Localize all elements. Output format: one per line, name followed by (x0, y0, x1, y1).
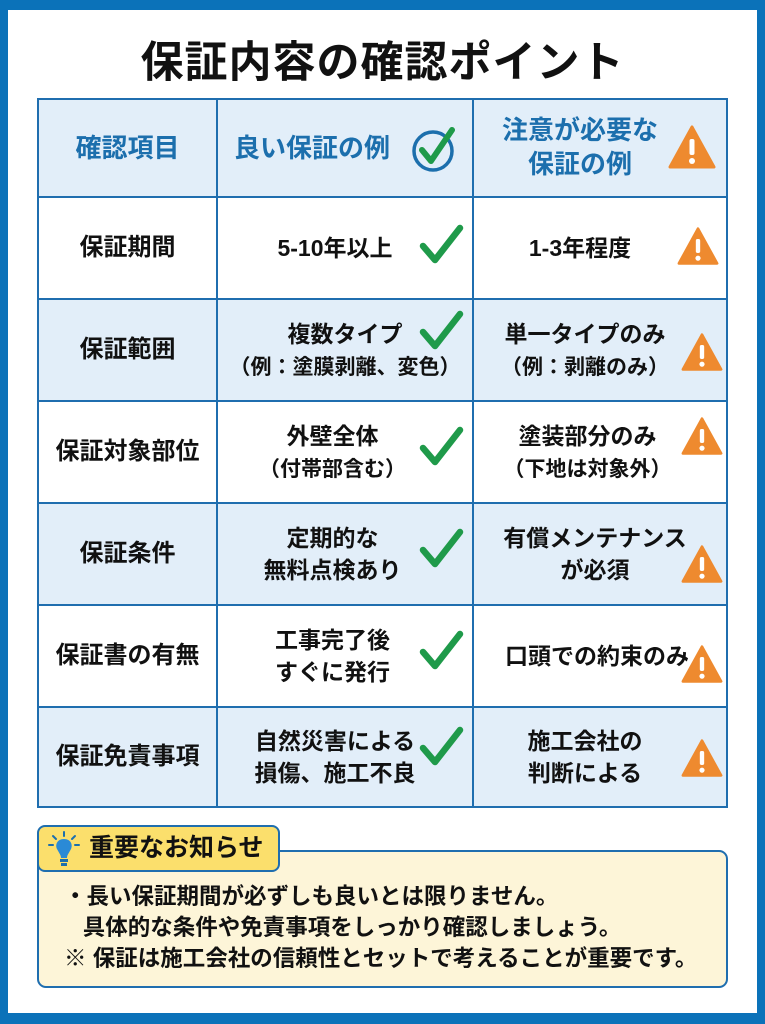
row3: 保証対象部位 (56, 438, 200, 465)
table: 1-3年程度 (529, 235, 631, 261)
row1 (39, 198, 218, 300)
table: 単一タイプのみ (504, 321, 666, 347)
table: 損傷、施工不良 (254, 760, 416, 786)
table: 有償メンテナンス (503, 525, 687, 551)
table: 自然災害による (255, 728, 415, 754)
warning icons (678, 227, 722, 777)
header: 確認項目: 確認項目 (75, 133, 180, 163)
table: が必須 (560, 557, 629, 583)
row4 (39, 504, 218, 606)
table: 施工会社の (528, 728, 642, 754)
header: 確認項目 (39, 100, 218, 198)
icon: header check circle (412, 127, 455, 172)
table: 外壁全体 (286, 423, 378, 449)
table: 塗装部分のみ (518, 423, 656, 449)
notice text: 具体的な条件や免責事項をしっかり確認しましょう。 (83, 915, 621, 940)
header: good (218, 100, 474, 198)
row2 (39, 300, 218, 402)
table: （下地は対象外） (504, 458, 672, 481)
notice text: ・長い保証期間が必ずしも良いとは限りません。 (64, 884, 558, 909)
row5: 保証書の有無 (56, 642, 200, 669)
check icons (420, 224, 464, 766)
row3 (39, 402, 218, 504)
row2: 保証範囲 (80, 336, 176, 363)
header: caution: 保証の例 (528, 149, 632, 179)
notice tab heading: 重要なお知らせ (89, 834, 264, 862)
row5 (39, 606, 218, 708)
row6 (39, 708, 218, 806)
notice text (64, 884, 697, 971)
row4: 保証条件 (80, 540, 176, 567)
table: （例：塗膜剥離、変色） (230, 356, 460, 379)
table: 判断による (528, 760, 642, 786)
title: 保証内容の確認ポイント (140, 39, 624, 87)
table: 複数タイプ (288, 321, 402, 347)
row1: 保証期間 (80, 234, 176, 261)
row6: 保証免責事項 (56, 743, 200, 770)
table: （付帯部含む） (259, 458, 406, 481)
table: （例：剥離のみ） (501, 356, 669, 379)
header: caution (474, 100, 728, 198)
table: 5-10年以上 (277, 235, 393, 261)
notice text: ※ 保証は施工会社の信頼性とセットで考えることが重要です。 (64, 946, 697, 971)
table: 定期的な (286, 525, 378, 551)
panel: notice (37, 850, 728, 988)
header: caution: 注意が必要な (502, 115, 658, 145)
table: 工事完了後 (275, 627, 390, 653)
header: good: 良い保証の例 (234, 133, 390, 163)
table: 無料点検あり (264, 557, 402, 583)
table: 口頭での約束のみ (505, 643, 689, 669)
icon: header warning (668, 125, 716, 168)
notice tab heading (37, 825, 280, 872)
icon: light bulb (48, 831, 80, 866)
table: すぐに発行 (275, 659, 390, 685)
table (37, 98, 728, 808)
